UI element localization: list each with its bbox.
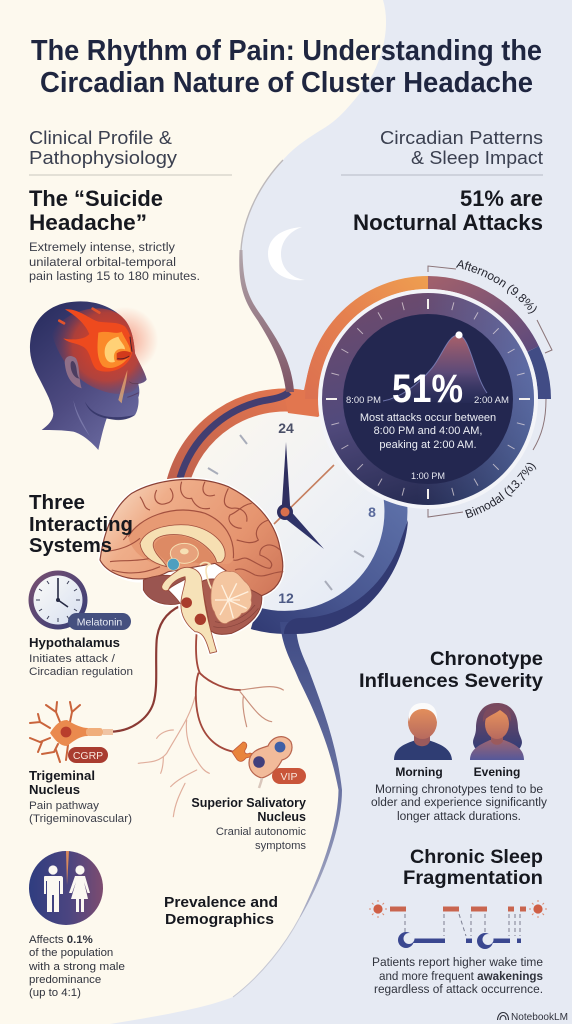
- clock numeral 8: 8: [368, 504, 376, 520]
- heading: nocturnal attacks: Nocturnal Attacks: [353, 210, 543, 235]
- text: pain description: Extremely intense, strictly: [29, 240, 176, 254]
- pill: CGRP: [68, 747, 108, 763]
- heading: circadian patterns: Circadian Patterns: [380, 127, 543, 148]
- pill: melatonin: [68, 613, 131, 630]
- icon: salivary cell: [232, 737, 292, 788]
- sun right: [529, 900, 547, 918]
- dial description: [360, 412, 496, 451]
- peak curve: [383, 335, 487, 403]
- heading: chronotype: Chronotype: [430, 648, 543, 670]
- text: superior salivatory nucleus: [191, 796, 306, 852]
- dial description: Most attacks occur between: [360, 412, 496, 424]
- chart: sleep fragmentation: [369, 900, 547, 949]
- time labels: 1:00 PM: [411, 471, 445, 481]
- sleep bars: [412, 938, 521, 943]
- minute hand: [282, 442, 290, 512]
- labels: chronotypes: Morning: [395, 765, 443, 779]
- icon: evening person: [470, 703, 524, 760]
- ring: navy arc: [254, 497, 396, 622]
- time labels: 8:00 PM: [346, 395, 381, 405]
- time labels: 2:00 AM: [474, 395, 509, 405]
- gyri: [105, 482, 283, 576]
- text: sleep description: [372, 955, 543, 996]
- text: sleep description: regardless of attack occurrence.: [374, 982, 543, 996]
- ring: orange arc: [178, 400, 300, 482]
- text: hypothalamus: Hypothalamus: [29, 636, 120, 650]
- dial description: peaking at 2:00 AM.: [379, 439, 477, 451]
- heading: sleep fragmentation: Chronic Sleep: [410, 846, 543, 868]
- labels: chronotypes: [395, 765, 520, 779]
- background: day side: [0, 0, 386, 1024]
- text: trigeminal nucleus: [29, 769, 132, 825]
- inner region: [154, 536, 216, 565]
- text: hypothalamus: Initiates attack /: [29, 653, 116, 665]
- nuclei markers: [181, 597, 192, 608]
- navy tail: [284, 520, 408, 634]
- clock ticks: [208, 435, 364, 590]
- label: afternoon: Afternoon (9.8%): [456, 260, 537, 314]
- heading: prevalence and demographics: Demographics: [165, 912, 274, 928]
- text: superior salivatory nucleus: Superior Salivatory: [191, 796, 306, 810]
- icon: population circle: [29, 851, 103, 925]
- female figure: [69, 865, 90, 912]
- heading: clinical profile: Clinical Profile &: [29, 127, 173, 148]
- heading: prevalence and demographics: [164, 895, 278, 928]
- brain halo: [100, 479, 283, 653]
- transition dashes: [405, 914, 520, 936]
- text: chronotype description: Morning chronotypes tend to be: [375, 782, 543, 796]
- cerebellum base: [202, 579, 262, 634]
- corpus callosum: [140, 525, 225, 567]
- brainstem: [162, 567, 217, 653]
- heading: nocturnal attacks: [353, 186, 543, 235]
- clock numeral 24: 24: [278, 420, 294, 436]
- text: sleep description: and more frequent awakenings: [379, 969, 543, 983]
- heading: three interacting systems: Three: [29, 492, 85, 514]
- icon: trigeminal neuron: [30, 702, 113, 762]
- clock with ring: [178, 335, 396, 622]
- nerve to salivary: [196, 620, 240, 752]
- thalamus spot: [180, 548, 189, 554]
- label: bimodal: Bimodal (13.7%): [465, 462, 536, 518]
- heading: suicide headache: [29, 186, 163, 235]
- clock hub: [277, 504, 293, 520]
- heading: circadian patterns: & Sleep Impact: [411, 147, 543, 168]
- notebooklm wordmark: NotebookLM: [511, 1012, 568, 1023]
- cerebrum: [100, 479, 283, 596]
- thalamus: [170, 543, 198, 563]
- text: prevalence stats: (up to 4:1): [29, 987, 81, 999]
- male figure: [44, 865, 63, 912]
- big stat: 51%: [392, 367, 463, 411]
- text: trigeminal nucleus: Trigeminal: [29, 769, 95, 783]
- text: superior salivatory nucleus: symptoms: [255, 840, 306, 852]
- pill: melatonin: Melatonin: [77, 616, 122, 628]
- second hand: [274, 465, 334, 524]
- text: prevalence stats: of the population: [29, 947, 113, 959]
- text: hypothalamus: [29, 636, 133, 678]
- heading: nocturnal attacks: 51% are: [460, 186, 543, 211]
- title: Circadian Nature of Cluster Headache: [40, 67, 533, 99]
- temporal lobe: [143, 575, 187, 605]
- text: trigeminal nucleus: Nucleus: [29, 783, 80, 797]
- dial description: 8:00 PM and 4:00 AM,: [374, 425, 482, 437]
- clock numeral 12: 12: [278, 590, 294, 606]
- heading: sleep fragmentation: Fragmentation: [403, 867, 543, 889]
- dial outer ring: bimodal: [533, 349, 544, 399]
- heading: chronotype: [359, 648, 543, 692]
- pill: VIP: VIP: [281, 771, 297, 783]
- moon left: [398, 932, 414, 948]
- title: [31, 35, 542, 99]
- text: pain description: [29, 240, 200, 283]
- icon: morning person: [394, 703, 452, 760]
- icon: notebooklm: [498, 1012, 508, 1020]
- heading: suicide headache: Headache”: [29, 210, 147, 235]
- hour hand: [282, 508, 324, 549]
- dial ticks: [331, 302, 525, 496]
- text: pain description: unilateral orbital-temporal: [29, 255, 176, 269]
- brain illustration: [100, 479, 283, 653]
- heading: three interacting systems: [29, 492, 133, 557]
- text: prevalence stats: with a strong male: [28, 961, 125, 973]
- heading: clinical profile: Pathophysiology: [29, 147, 178, 168]
- moon right: [477, 933, 494, 949]
- icon: small clock: [28, 570, 88, 630]
- pill: CGRP: CGRP: [73, 750, 103, 762]
- hypothalamus marker: [167, 558, 179, 570]
- line: day night divider lower: [280, 622, 342, 917]
- text: trigeminal nucleus: Pain pathway: [29, 800, 100, 812]
- heading: three interacting systems: Interacting: [29, 514, 133, 536]
- nerves: [110, 603, 283, 817]
- fading branches: [138, 697, 209, 817]
- heading: chronotype: Influences Severity: [359, 670, 543, 692]
- heading: three interacting systems: Systems: [29, 535, 112, 557]
- brackets: [428, 266, 552, 517]
- heading: clinical profile: [29, 127, 232, 176]
- text: trigeminal nucleus: (Trigeminovascular): [29, 813, 132, 825]
- text: pain description: pain lasting 15 to 180 minutes.: [29, 269, 200, 283]
- text: superior salivatory nucleus: Nucleus: [257, 810, 306, 824]
- icon: crescent moon: [268, 227, 305, 280]
- ring connector: [283, 335, 335, 417]
- peak marker: [455, 331, 463, 339]
- heading: sleep fragmentation: [403, 846, 543, 889]
- time labels: [346, 395, 509, 481]
- text: sleep description: Patients report higher wake time: [372, 955, 543, 969]
- text: chronotype description: older and experience significantly: [371, 795, 548, 809]
- text: hypothalamus: Circadian regulation: [29, 666, 133, 678]
- line: upper boundary: [241, 160, 283, 250]
- text: superior salivatory nucleus: Cranial autonomic: [216, 826, 306, 838]
- text: prevalence stats: predominance: [29, 974, 101, 986]
- navy stripe: [180, 392, 289, 478]
- line: faint lower boundary: [233, 917, 300, 997]
- title: The Rhythm of Pain: Understanding the: [31, 35, 542, 67]
- line: day night divider upper: [239, 250, 294, 392]
- nerve to trigeminal: [110, 603, 187, 732]
- wake bars: [390, 906, 526, 912]
- right branches: [240, 687, 283, 727]
- pons curl: [200, 562, 215, 593]
- dial: [318, 289, 538, 509]
- icon: head with burning pain: [30, 301, 158, 450]
- pill: VIP: [272, 768, 306, 784]
- cerebellum: [211, 571, 252, 624]
- dial major ticks: [326, 299, 530, 499]
- heading: prevalence and demographics: Prevalence and: [164, 895, 278, 911]
- dial outer ring: orange: [312, 282, 428, 399]
- dial outer ring: afternoon: [428, 282, 533, 349]
- text: prevalence stats: Affects 0.1%: [29, 934, 93, 946]
- text: prevalence stats: [28, 934, 125, 999]
- cingulate band: [128, 510, 234, 567]
- text: chronotype description: [371, 782, 548, 823]
- heading: suicide headache: The “Suicide: [29, 186, 163, 211]
- heading: circadian patterns: [341, 127, 543, 176]
- sun left: [369, 900, 387, 918]
- labels: chronotypes: Evening: [474, 765, 520, 779]
- text: chronotype description: longer attack durations.: [397, 809, 521, 823]
